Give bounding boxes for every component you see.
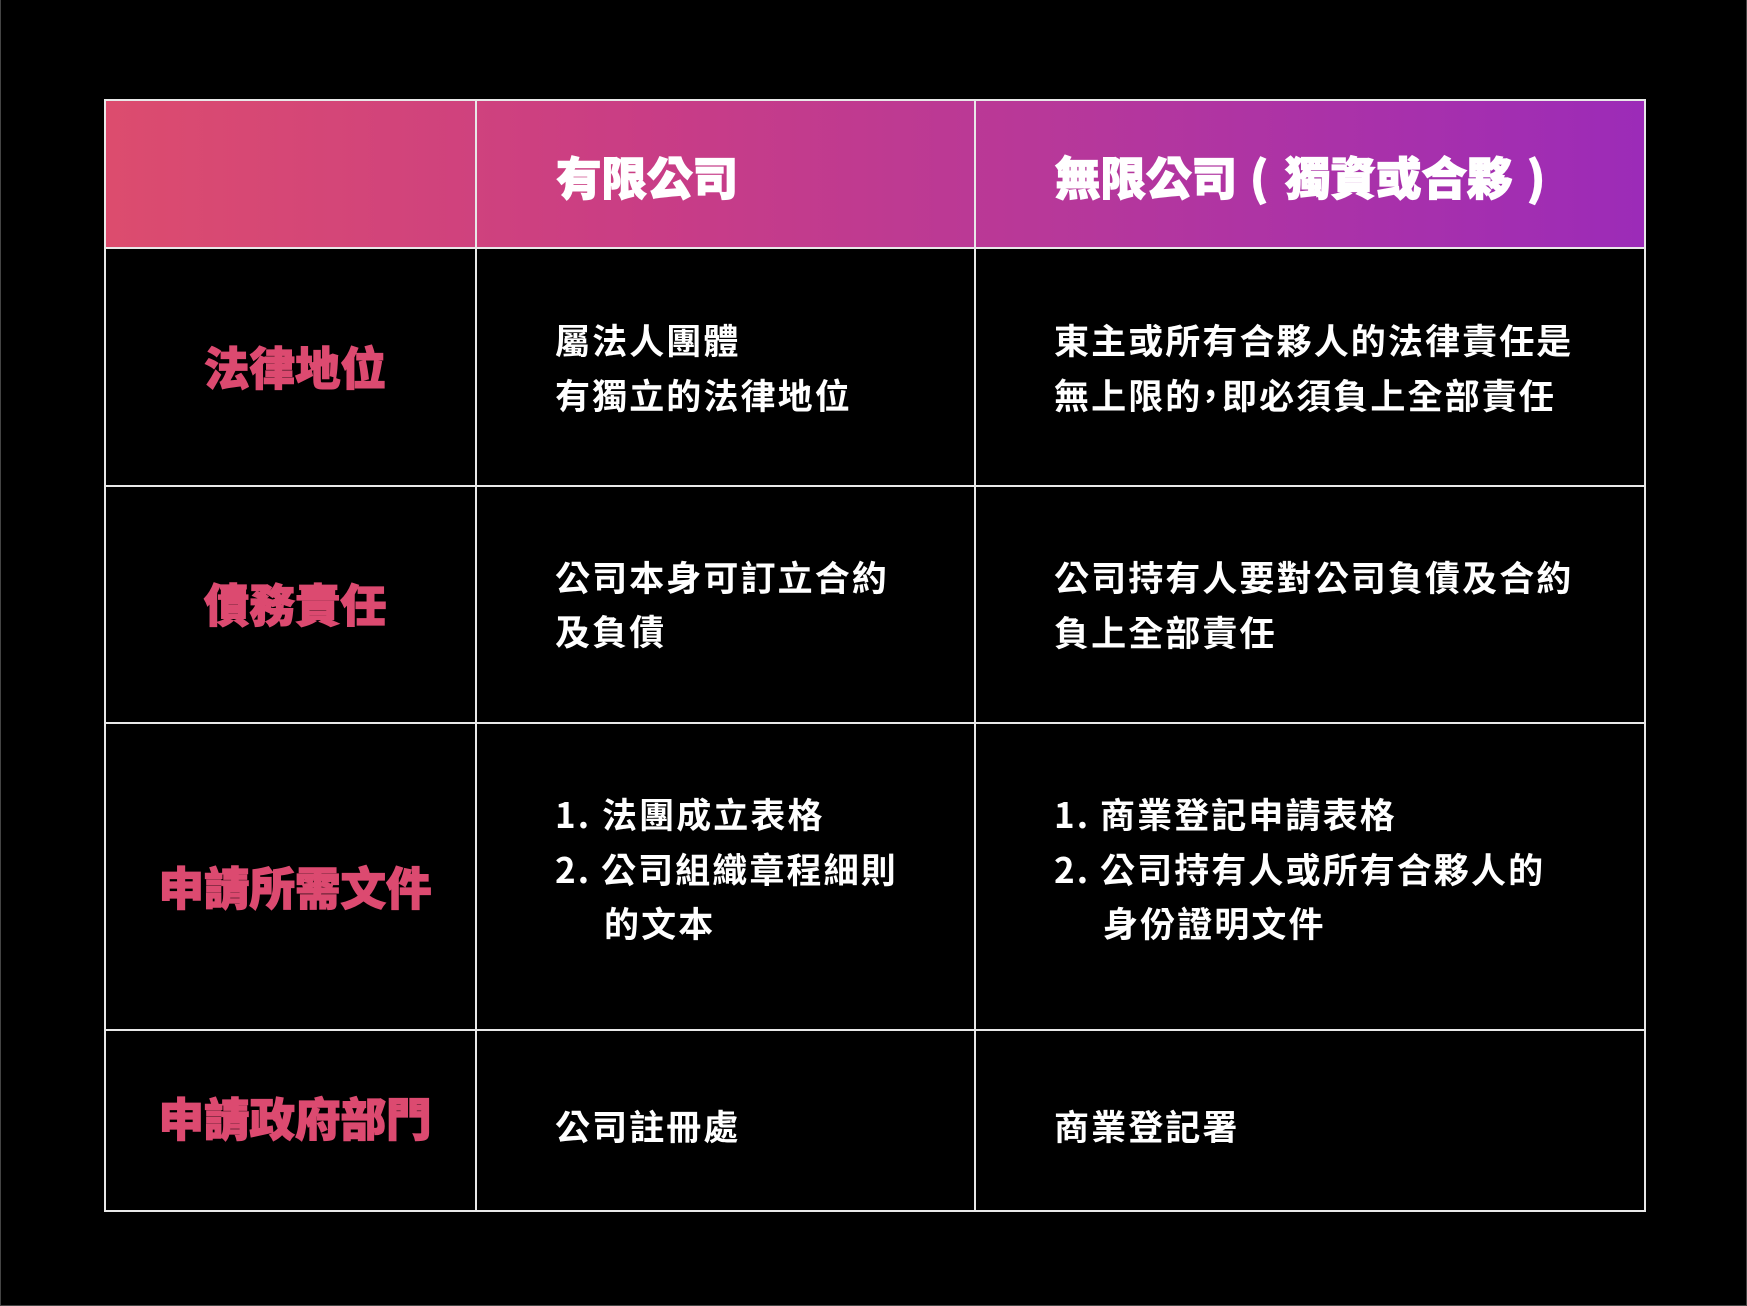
text: department, limited company: 公司註冊處 [555, 1100, 741, 1151]
text: required documents, limited company: 公司組織章程細則 [601, 842, 898, 894]
text: required documents, limited company: 法團成立表格 [602, 788, 825, 839]
text: required documents, limited company: 2. [555, 842, 591, 894]
row label: government department: 申請政府部門 [158, 1084, 432, 1150]
text: required documents, unlimited company: 公司持有人或所有合夥人的 [1100, 842, 1545, 894]
text: legal status, unlimited company: ， [1193, 368, 1230, 420]
heading: unlimited company: 無限公司 [1055, 143, 1237, 209]
text: legal status, limited company: 屬法人團體 [555, 314, 741, 365]
text: required documents, unlimited company: 商業登記申請表格 [1100, 788, 1397, 839]
text: legal status, limited company [555, 314, 852, 420]
text: required documents, unlimited company: 1. [1054, 788, 1090, 839]
heading: unlimited company: ( [1250, 143, 1268, 209]
heading: limited company: 有限公司 [556, 143, 738, 209]
text: debt liability, unlimited company: 公司持有人要對公司負債及合約 [1054, 551, 1573, 602]
text: debt liability, unlimited company: 負上全部責任 [1054, 606, 1277, 656]
text: required documents, limited company [555, 788, 898, 948]
text: debt liability, unlimited company [1054, 551, 1573, 656]
text: legal status, unlimited company: 無上限的 [1054, 368, 1202, 420]
text: required documents, limited company: 的文本 [604, 897, 715, 948]
text: required documents, limited company: 1. [555, 788, 591, 839]
row label: required documents: 申請所需文件 [158, 853, 432, 919]
text: debt liability, limited company: 及負債 [555, 605, 666, 656]
header gradient band [105, 100, 1645, 248]
row label: legal status: 法律地位 [204, 333, 386, 399]
text: required documents, unlimited company [1054, 788, 1545, 948]
text: required documents, unlimited company: 2. [1054, 842, 1090, 894]
text: legal status, unlimited company [1054, 314, 1573, 420]
row label: debt liability: 債務責任 [204, 570, 386, 636]
text: department, unlimited company: 商業登記署 [1054, 1100, 1240, 1151]
text: debt liability, limited company [555, 551, 889, 656]
heading: unlimited company: 獨資或合夥 [1285, 143, 1513, 209]
text: legal status, unlimited company: 即必須負上全部責任 [1222, 368, 1556, 420]
text: required documents, unlimited company: 身份證明文件 [1103, 897, 1326, 948]
heading: unlimited company: ) [1527, 143, 1545, 209]
text: legal status, unlimited company: 東主或所有合夥人的法律責任是 [1054, 314, 1573, 365]
text: legal status, limited company: 有獨立的法律地位 [555, 368, 852, 420]
heading: unlimited company [1054, 143, 1545, 209]
text: debt liability, limited company: 公司本身可訂立合約 [555, 551, 889, 602]
